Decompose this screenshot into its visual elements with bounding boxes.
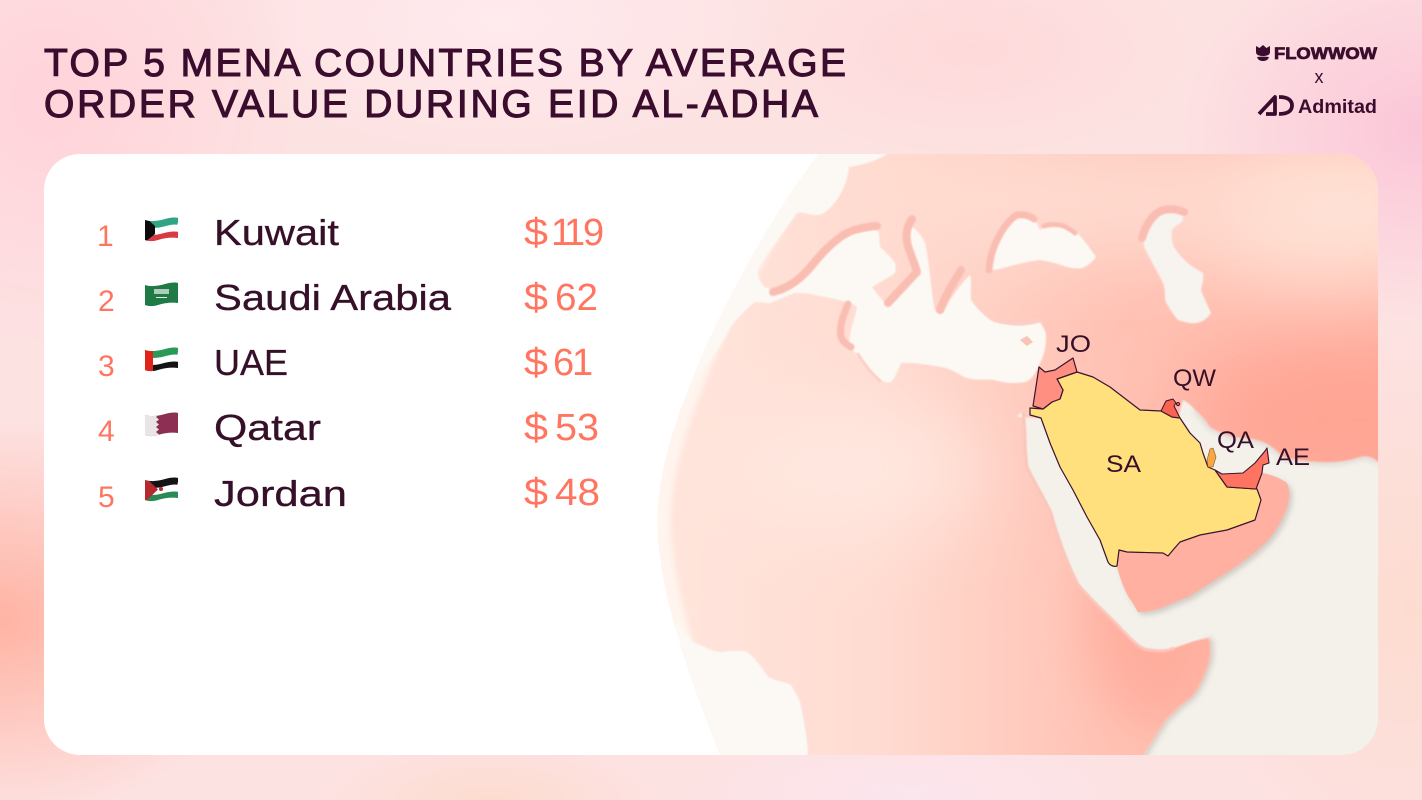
country name: Saudi Arabia: [214, 277, 452, 318]
panel: white card: [44, 154, 1378, 755]
flag: UAE: [144, 347, 179, 372]
rank: 1: [97, 220, 114, 253]
value: 61: [553, 342, 593, 384]
country: Kuwait: [1161, 399, 1180, 418]
country name: Jordan: [214, 473, 347, 514]
sea: Mediterranean: [769, 227, 1046, 383]
flag: Jordan: [144, 477, 179, 502]
value: $: [524, 342, 548, 384]
country: Qatar: [1207, 448, 1216, 467]
flag: Kuwait: [144, 217, 179, 242]
land: southern Arabian peninsula: [1116, 473, 1294, 617]
ranking row 4: Qatar: [98, 412, 598, 448]
value: 48: [555, 472, 600, 514]
sea: Black Sea: [987, 215, 1096, 270]
value: [524, 212, 604, 254]
map labels: QA: [1217, 427, 1254, 454]
map labels: AE: [1276, 444, 1310, 471]
coast relief: [773, 209, 1184, 381]
map labels: SA: [1106, 451, 1141, 478]
map labels: JO: [1056, 331, 1091, 358]
value: 62: [555, 277, 598, 319]
ranking row 1: Kuwait: [99, 216, 602, 248]
value: $: [524, 212, 548, 254]
logo: Admitad: [1259, 97, 1377, 118]
ranking row 2: Saudi Arabia: [100, 282, 596, 313]
title: [44, 42, 846, 126]
land: Red Sea west coast highlight: [1023, 412, 1174, 651]
ranking row 5: Jordan: [99, 476, 598, 508]
value: [524, 407, 599, 449]
country name: UAE: [214, 342, 288, 383]
island: Cyprus: [1020, 336, 1033, 346]
sea: Atlantic rim: [713, 154, 886, 354]
map labels: [1056, 331, 1310, 478]
value: 53: [555, 407, 599, 449]
value: $: [524, 407, 548, 449]
logo: Admitad: Admitad: [1298, 97, 1377, 118]
value: [524, 277, 598, 319]
title: ORDER VALUE DURING EID AL-ADHA: [44, 83, 818, 126]
logo separator: x: [1314, 67, 1324, 87]
title: TOP 5 MENA COUNTRIES BY AVERAGE: [44, 42, 846, 85]
sea: Gulf of Guinea: [688, 638, 808, 755]
country name: Kuwait: [214, 212, 339, 253]
logo: Flowwow: FLOWWOW: [1274, 44, 1378, 63]
rank: 4: [98, 415, 115, 448]
flag: Qatar: [145, 412, 178, 437]
country: Saudi Arabia: [1030, 372, 1261, 566]
rank: 2: [98, 285, 115, 318]
country: UAE: [1215, 448, 1269, 489]
value: 119: [551, 212, 604, 254]
country: Jordan: [1033, 358, 1077, 409]
flag: Saudi Arabia: [145, 282, 178, 307]
sea: Red Sea, Persian Gulf and Indian Ocean: [1017, 400, 1400, 760]
rank: 3: [98, 350, 115, 383]
map: globe with Arabian peninsula: [658, 154, 1378, 755]
ranking row 3: UAE: [99, 346, 592, 378]
rank: 5: [98, 481, 115, 514]
sea: Caspian: [1143, 207, 1211, 323]
country name: Qatar: [214, 407, 321, 448]
map labels: QW: [1173, 365, 1216, 392]
value: $: [524, 277, 548, 319]
coast shadow on the sea: [1141, 410, 1378, 760]
value: [524, 342, 593, 384]
value: $: [524, 472, 548, 514]
value: [524, 472, 600, 514]
rim of the globe: [658, 249, 772, 642]
